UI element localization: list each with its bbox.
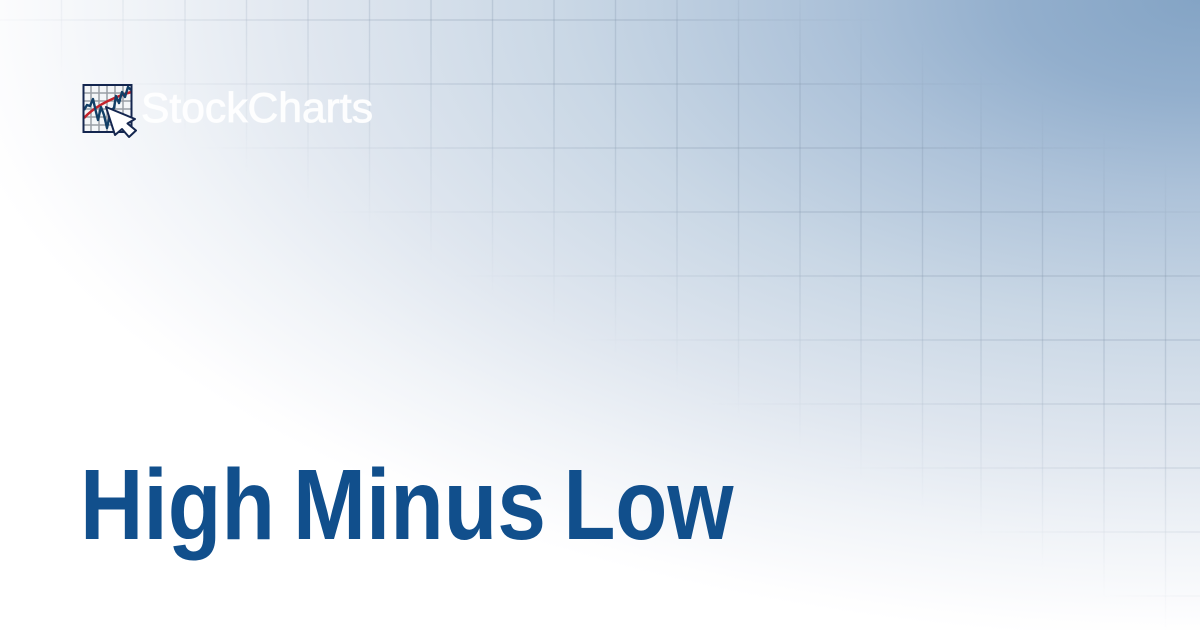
title: Low: [564, 449, 734, 561]
title: Minus: [293, 449, 546, 561]
logo: StockCharts: [83, 84, 373, 137]
title: [80, 449, 734, 561]
title: High: [80, 449, 275, 561]
icon: chart with cursor: [83, 85, 136, 137]
logo wordmark: StockCharts: [141, 84, 373, 131]
